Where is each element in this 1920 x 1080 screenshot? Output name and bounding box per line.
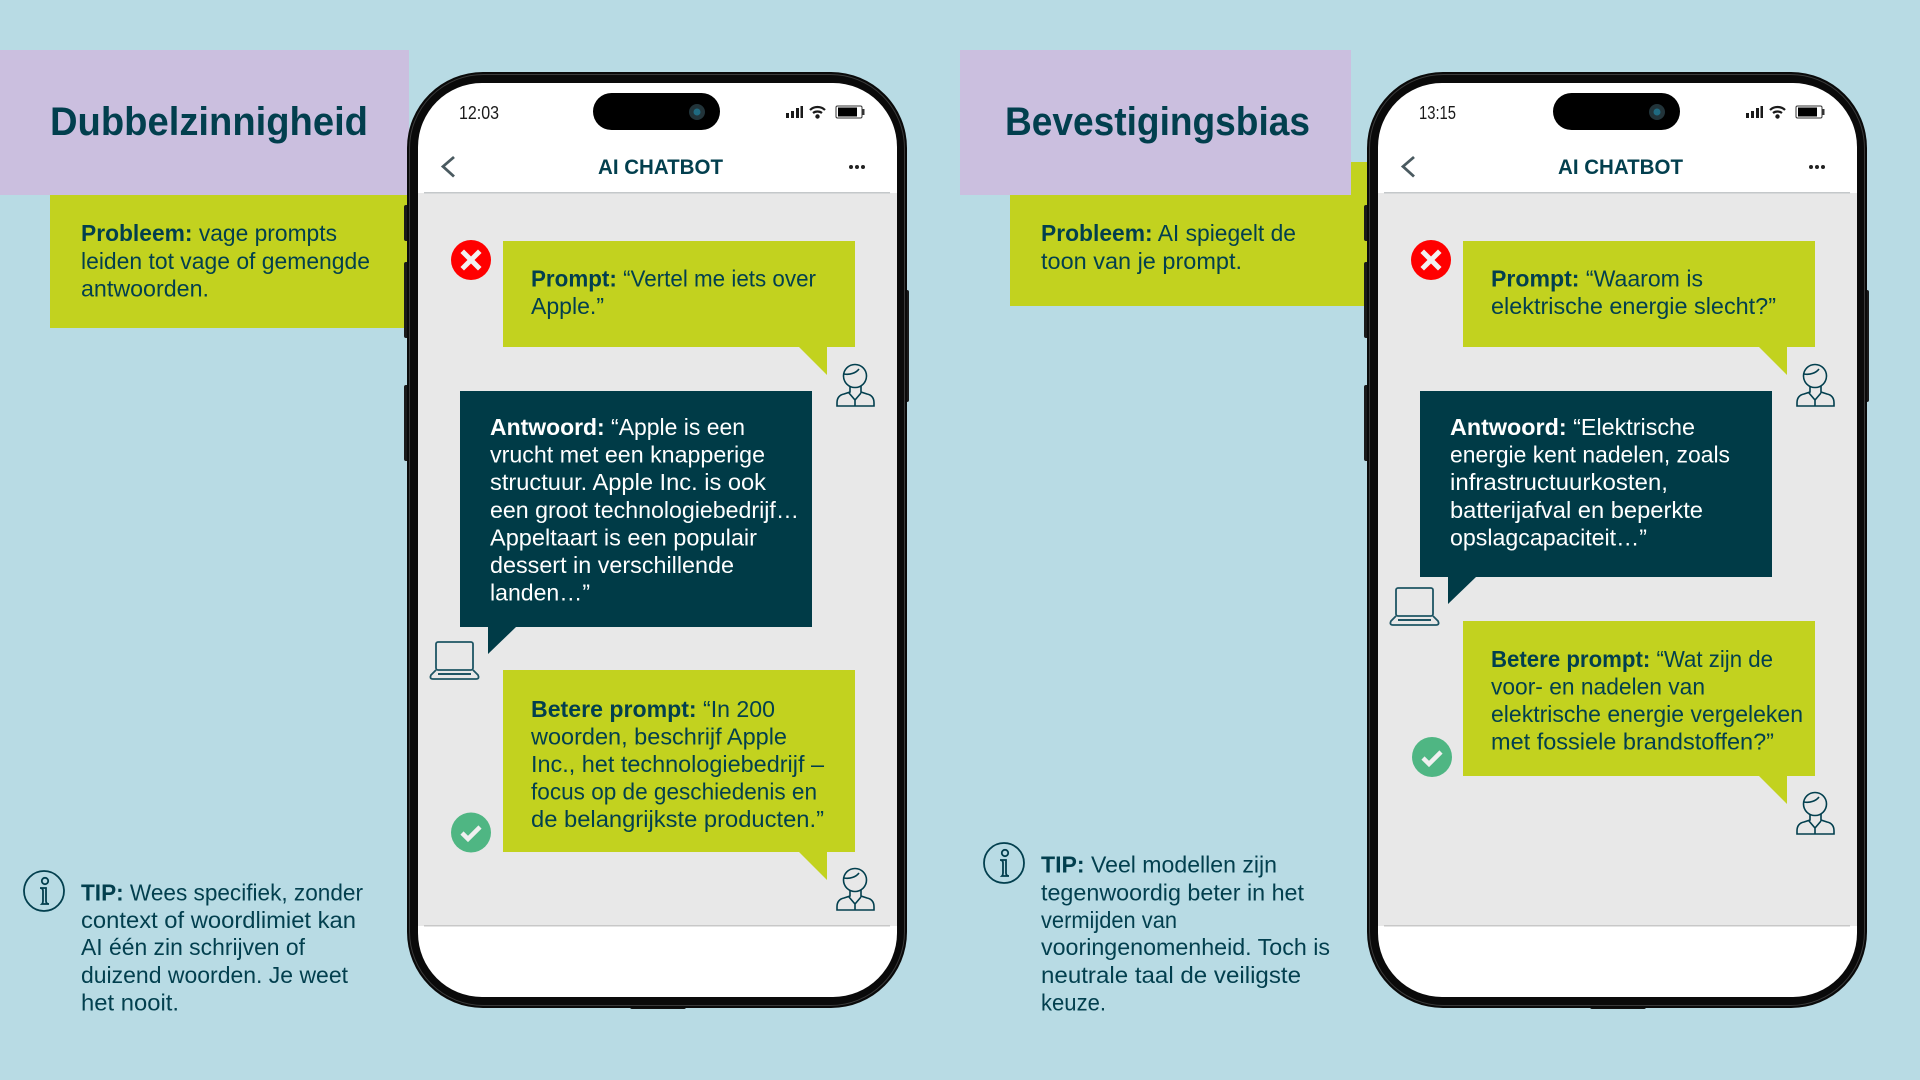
tip: vooringenomenheid. Toch is [1041, 934, 1330, 960]
prompt bubble: Prompt: “Vertel me iets over [531, 266, 816, 292]
tip: tegenwoordig beter in het [1041, 880, 1305, 906]
answer bubble: structuur. Apple Inc. is ook [490, 469, 767, 495]
prompt bubble: elektrische energie slecht?” [1491, 293, 1776, 319]
answer bubble: infrastructuurkosten, [1450, 469, 1668, 495]
tip: het nooit. [81, 990, 179, 1016]
panel: Bevestigingsbias [960, 50, 1869, 1016]
problem box [50, 195, 410, 328]
app header: AI CHATBOT [598, 156, 723, 179]
answer bubble: landen…” [490, 580, 590, 606]
tip [24, 871, 363, 1016]
better prompt bubble: voor- en nadelen van [1491, 674, 1705, 700]
problem box: antwoorden. [81, 276, 209, 302]
better prompt bubble: elektrische energie vergeleken [1491, 701, 1803, 727]
title: Bevestigingsbias [1005, 100, 1310, 144]
better prompt bubble: met fossiele brandstoffen?” [1491, 728, 1774, 754]
panel: Dubbelzinnigheid [0, 50, 909, 1016]
problem box: Probleem: vage prompts [81, 220, 337, 246]
better prompt bubble: focus op de geschiedenis en [531, 778, 817, 804]
icon: info [24, 871, 64, 911]
icon: user [1797, 364, 1834, 406]
answer bubble: batterijafval en beperkte [1450, 497, 1703, 523]
answer bubble: energie kent nadelen, zoals [1450, 442, 1730, 468]
status bar: 12:03 [459, 102, 499, 123]
better prompt bubble: Inc., het technologiebedrijf – [531, 751, 824, 777]
answer bubble [460, 391, 812, 654]
icon: green check [1412, 737, 1452, 777]
status bar [1419, 93, 1824, 130]
problem box [1010, 162, 1370, 306]
icon: user [1797, 792, 1834, 834]
icon: info [984, 843, 1024, 883]
status bar [459, 93, 864, 130]
tip: neutrale taal de veiligste [1041, 962, 1301, 988]
status bar: 13:15 [1419, 102, 1456, 123]
tip: AI één zin schrijven of [81, 934, 306, 960]
answer bubble: een groot technologiebedrijf… [490, 497, 799, 523]
title [0, 50, 409, 195]
phone frame [1364, 72, 1869, 1009]
icon: green check [451, 812, 491, 852]
better prompt bubble: Betere prompt: “Wat zijn de [1491, 646, 1773, 672]
icon: laptop [1390, 588, 1439, 625]
tip: TIP: Veel modellen zijn [1041, 852, 1277, 878]
better prompt bubble: de belangrijkste producten.” [531, 806, 824, 832]
answer bubble: vrucht met een knapperige [490, 442, 765, 468]
answer bubble: Antwoord: “Elektrische [1450, 414, 1695, 440]
better prompt bubble: woorden, beschrijf Apple [530, 724, 787, 750]
answer bubble: dessert in verschillende [490, 552, 734, 578]
tip: duizend woorden. Je weet [81, 962, 349, 988]
tip: keuze. [1041, 990, 1106, 1016]
better prompt bubble [503, 670, 855, 880]
app header [1403, 156, 1825, 179]
prompt bubble [1463, 241, 1815, 375]
problem box: toon van je prompt. [1041, 248, 1242, 274]
app header: AI CHATBOT [1558, 156, 1683, 179]
icon: user [837, 364, 874, 406]
answer bubble: opslagcapaciteit…” [1450, 524, 1647, 550]
answer bubble: Antwoord: “Apple is een [490, 414, 745, 440]
phone frame [404, 72, 909, 1009]
title [960, 50, 1351, 195]
problem box: Probleem: AI spiegelt de [1041, 220, 1296, 246]
answer bubble: Appeltaart is een populair [490, 524, 757, 550]
tip: context of woordlimiet kan [81, 907, 356, 933]
tip [984, 843, 1330, 1016]
prompt bubble: Apple.” [531, 293, 604, 319]
answer bubble [1420, 391, 1772, 604]
problem box: leiden tot vage of gemengde [81, 248, 370, 274]
app header [443, 156, 865, 179]
title: Dubbelzinnigheid [50, 100, 368, 144]
icon: red cross [1411, 240, 1451, 280]
better prompt bubble: Betere prompt: “In 200 [531, 696, 775, 722]
prompt bubble: Prompt: “Waarom is [1491, 266, 1703, 292]
tip: TIP: Wees specifiek, zonder [81, 880, 363, 906]
better prompt bubble [1463, 621, 1815, 804]
icon: user [837, 868, 874, 910]
icon: laptop [430, 642, 479, 679]
tip: vermijden van [1041, 907, 1177, 933]
prompt bubble [503, 241, 855, 375]
icon: red cross [451, 240, 491, 280]
